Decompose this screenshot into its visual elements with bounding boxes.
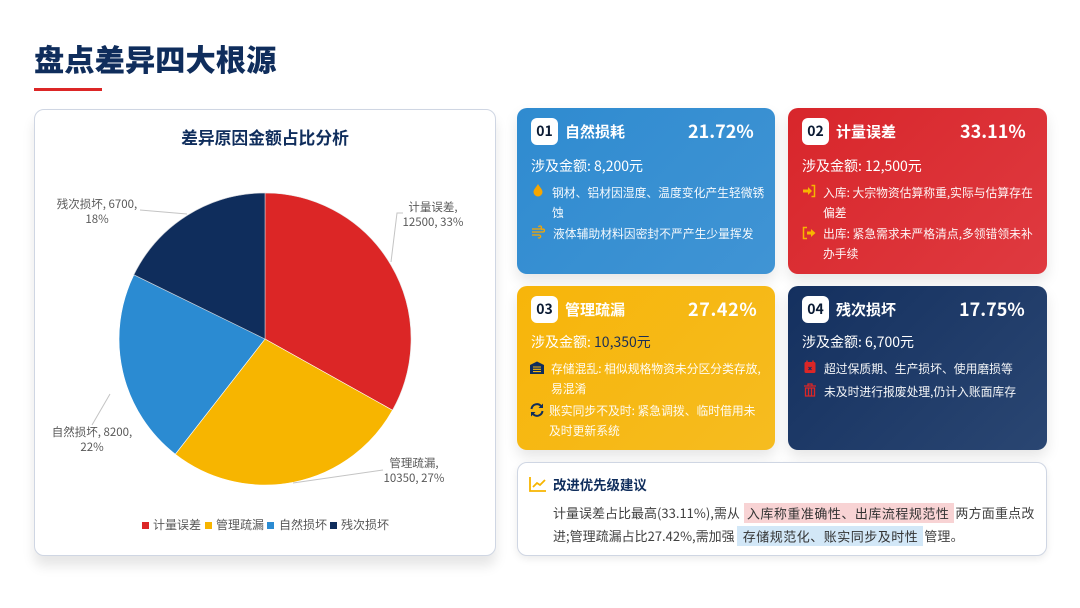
icon: sign in	[803, 184, 816, 198]
text: item 1	[552, 184, 764, 221]
panel: card 04 残次损坏	[788, 286, 1047, 450]
percentage: 21.72%	[688, 118, 754, 144]
title: 盘点差异四大根源	[34, 36, 276, 80]
icon: wind	[532, 225, 545, 239]
badge 03: 03	[536, 299, 553, 319]
icon: drop	[534, 184, 542, 196]
text: item 2	[549, 402, 755, 439]
slice: 管理疏漏	[175, 339, 392, 485]
recommendation text	[553, 503, 1035, 546]
card heading: 残次损坏	[836, 299, 896, 320]
icon: sign out	[802, 226, 816, 240]
badge 01	[531, 118, 558, 145]
legend: 自然损坏	[279, 516, 327, 533]
text: item 2: 液体辅助材料因密封不严产生少量挥发	[553, 225, 754, 242]
text: item 1: 偏差	[823, 204, 847, 221]
panel: card 01 自然损耗	[517, 108, 775, 274]
icon: line chart	[529, 477, 546, 492]
text: item 2: 出库: 紧急需求未严格清点,多领错领未补	[823, 225, 1033, 242]
percentage: 27.42%	[688, 296, 757, 322]
panel: pie chart	[34, 109, 496, 556]
pie labels: 22%	[80, 439, 104, 455]
icon: calendar	[804, 360, 816, 373]
icon: sync	[530, 403, 544, 417]
card heading: 管理疏漏	[565, 299, 625, 320]
amount: 涉及金额: 8,200元	[531, 156, 643, 176]
text: item 2: 办手续	[823, 245, 858, 262]
badge 03	[531, 296, 558, 323]
text: item 1: 入库: 大宗物资估算称重,实际与估算存在	[823, 184, 1033, 201]
text: item 2: 未及时进行报废处理,仍计入账面库存	[824, 383, 1016, 400]
percentage: 17.75%	[959, 296, 1025, 322]
pie labels: 计量误差,	[408, 199, 458, 215]
text: item 1: 钢材、铝材因湿度、温度变化产生轻微锈	[552, 184, 764, 201]
text: item 2	[823, 225, 1033, 262]
text: item 1: 蚀	[552, 204, 564, 221]
text: item 1: 超过保质期、生产损坏、使用磨损等	[824, 360, 1013, 377]
badge 01: 01	[536, 121, 553, 141]
badge 02: 02	[807, 121, 824, 141]
pie labels	[52, 196, 464, 486]
legend	[142, 516, 389, 533]
icon: trash	[804, 383, 816, 397]
text: item 1: 易混淆	[551, 380, 586, 397]
legend: 计量误差	[153, 516, 201, 533]
slice: 自然损坏	[119, 275, 265, 454]
legend: 残次损坏	[341, 516, 389, 533]
text: item 1	[823, 184, 1033, 221]
amount: 涉及金额: 6,700元	[802, 332, 914, 352]
pie labels: 18%	[85, 211, 109, 227]
amount: 涉及金额: 12,500元	[802, 156, 922, 176]
recommendation heading: 改进优先级建议	[553, 474, 647, 494]
icon: warehouse	[530, 362, 544, 374]
card heading: 计量误差	[836, 121, 896, 142]
title underline	[34, 88, 102, 91]
panel: card 02 计量误差	[788, 108, 1047, 274]
pie labels: 自然损坏, 8200,	[52, 424, 132, 440]
badge 04	[802, 296, 829, 323]
pie chart	[52, 192, 464, 533]
percentage: 33.11%	[960, 118, 1026, 144]
recommendation text: 计量误差占比最高(33.11%),需从 入库称重准确性、出库流程规范性 两方面重点改	[553, 503, 1035, 522]
recommendation text: 进;管理疏漏占比27.42%,需加强 存储规范化、账实同步及时性 管理。	[553, 526, 964, 545]
text: item 1: 存储混乱: 相似规格物资未分区分类存放,	[551, 360, 761, 377]
slice: 残次损坏	[134, 193, 265, 339]
pie labels: 12500, 33%	[402, 214, 464, 230]
card heading: 自然损耗	[565, 121, 625, 142]
pie labels: 10350, 27%	[383, 470, 445, 486]
legend: 管理疏漏	[216, 516, 264, 533]
text: item 1	[551, 360, 761, 397]
badge 04: 04	[807, 299, 824, 319]
panel: recommendation	[517, 462, 1047, 556]
text: item 2: 账实同步不及时: 紧急调拨、临时借用未	[549, 402, 755, 419]
pie labels: 管理疏漏,	[389, 455, 439, 471]
panel: card 03 管理疏漏	[517, 286, 775, 450]
slice: 计量误差	[265, 193, 411, 410]
text: item 2: 及时更新系统	[549, 422, 620, 439]
pie labels: 残次损坏, 6700,	[57, 196, 137, 212]
amount: 涉及金额: 10,350元	[531, 332, 651, 352]
chart title: 差异原因金额占比分析	[181, 125, 349, 149]
leader lines	[92, 210, 403, 483]
badge 02	[802, 118, 829, 145]
